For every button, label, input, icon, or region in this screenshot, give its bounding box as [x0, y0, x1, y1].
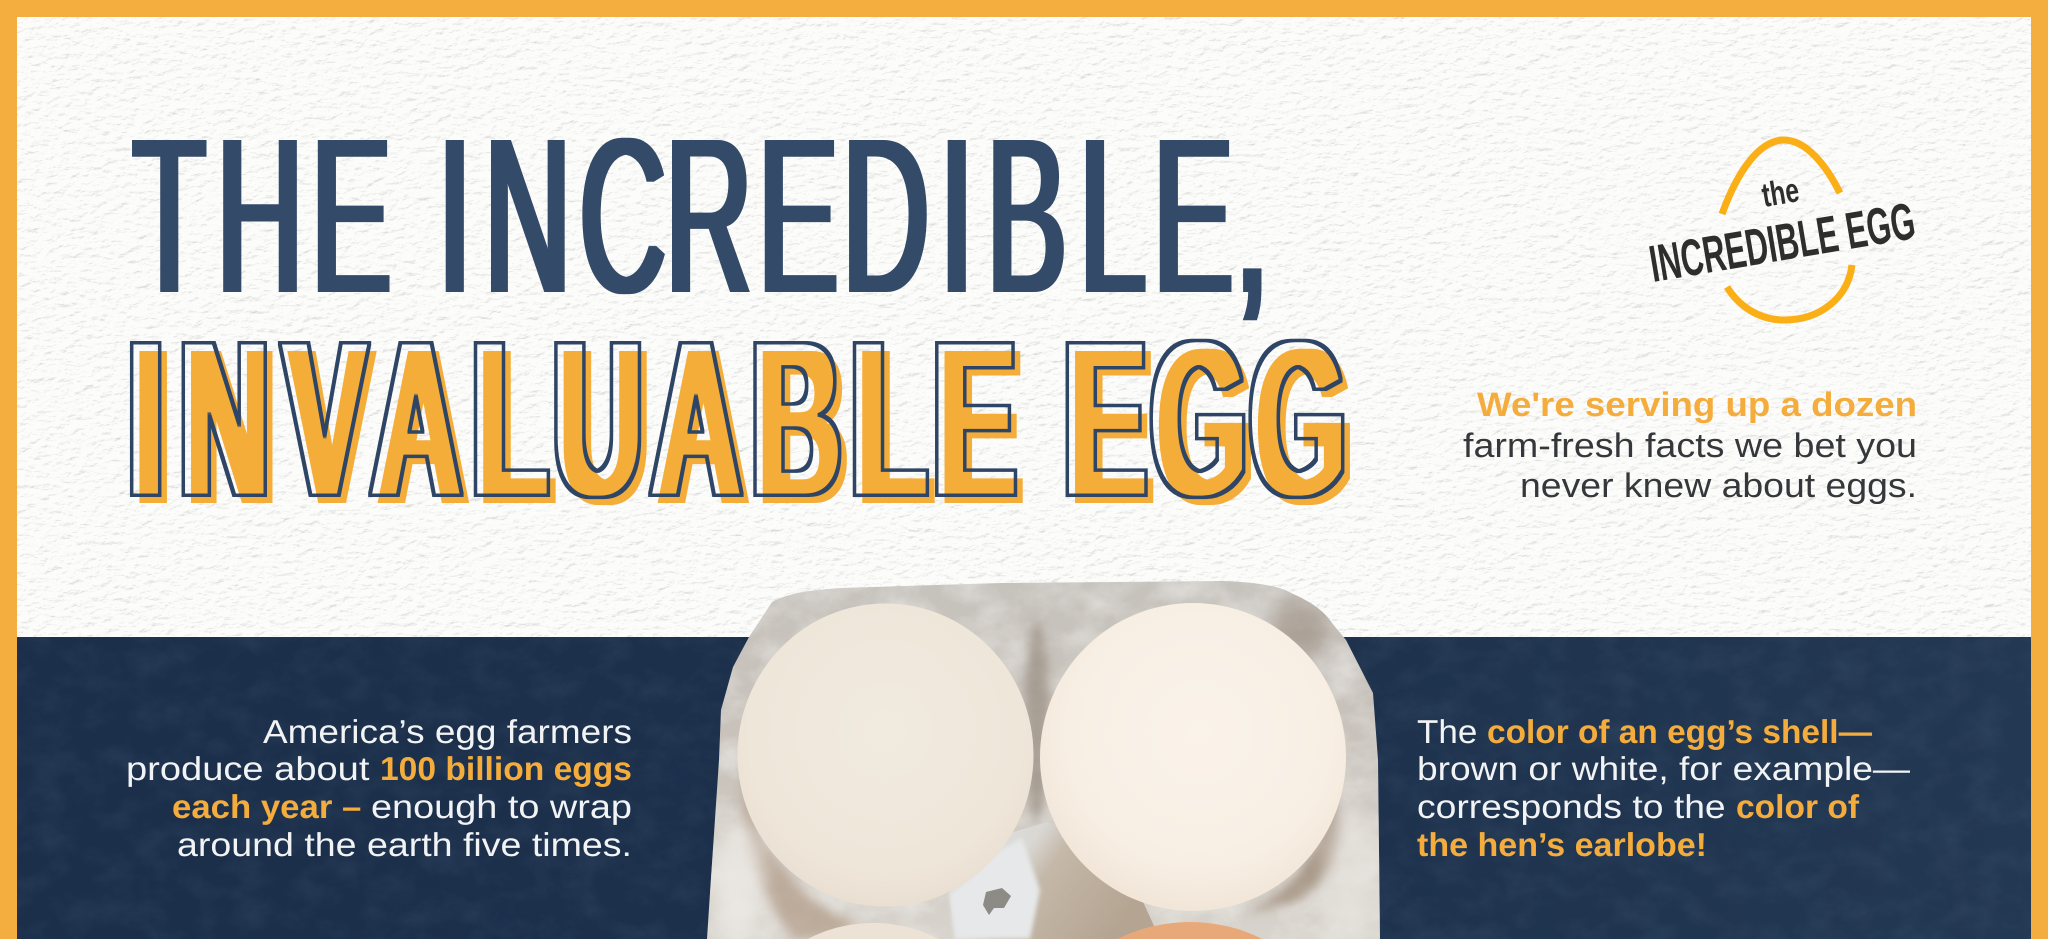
fact: 100 billion eggs: enough to wrap [371, 788, 632, 825]
panel: paper header [17, 17, 2031, 637]
logo: the incredible egg: the [1759, 171, 1802, 215]
egg: top left white [738, 604, 1034, 906]
egg: top right white [1040, 603, 1346, 911]
egg: bottom left white [808, 923, 938, 939]
egg: bottom right brown [1118, 922, 1262, 939]
fact: shell colour: brown or white, for example— [1417, 750, 1910, 787]
fact: shell colour [1417, 713, 1910, 863]
intro text [1463, 386, 1917, 505]
intro text: We're serving up a dozen [1477, 386, 1917, 424]
egg carton photo [707, 581, 1380, 939]
fact: 100 billion eggs: around the earth five times. [177, 826, 632, 863]
fact: 100 billion eggs: each year – [172, 788, 371, 825]
carton body [707, 581, 1380, 939]
fact: 100 billion eggs: produce about [126, 750, 380, 787]
panel: navy band [17, 637, 2031, 939]
fact: 100 billion eggs [126, 713, 632, 863]
fact: 100 billion eggs: 100 billion eggs [380, 750, 632, 787]
intro text: never knew about eggs. [1520, 467, 1917, 505]
fact: 100 billion eggs: America’s egg farmers [263, 713, 632, 750]
title line 1: THE INCREDIBLE, [133, 92, 1269, 339]
logo: the incredible egg [1645, 140, 1919, 320]
carton centre cup [949, 822, 1160, 939]
fact: shell colour: corresponds to the [1417, 788, 1736, 825]
fact: shell colour: color of an egg’s shell— [1487, 713, 1872, 750]
intro text: farm-fresh facts we bet you [1463, 427, 1917, 465]
carton shading [712, 600, 1378, 939]
fact: shell colour: color of [1736, 788, 1860, 825]
fact: shell colour: The [1417, 713, 1487, 750]
title line 2: INVALUABLE EGG [129, 295, 1345, 542]
fact: shell colour: the hen’s earlobe! [1417, 826, 1707, 863]
